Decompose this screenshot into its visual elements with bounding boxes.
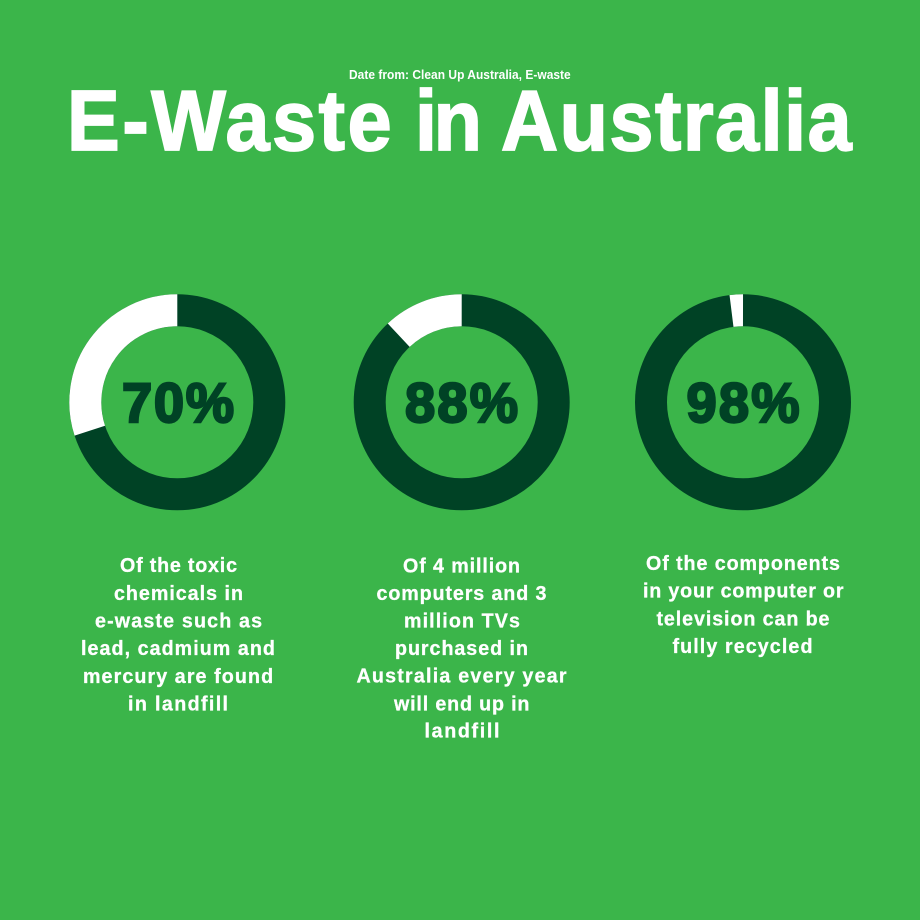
description: toxic chemicals: e-waste such as	[95, 610, 262, 633]
description: recyclable components	[643, 553, 844, 658]
title: in	[415, 74, 482, 169]
description: computers and TVs: million TVs	[404, 610, 520, 633]
description: recyclable components: in your computer or	[643, 580, 844, 603]
description: toxic chemicals: lead, cadmium and	[81, 638, 275, 660]
panel: 70 percent	[81, 310, 275, 716]
description: recyclable components: Of the components	[646, 553, 840, 575]
description: toxic chemicals: mercury are found	[83, 666, 273, 688]
title: E-Waste	[67, 74, 392, 169]
percentage: 70%: 70%	[122, 371, 234, 434]
percentage: 88%: 88%	[405, 371, 518, 434]
description: computers and TVs: computers and 3	[376, 583, 546, 605]
panel: 98 percent	[643, 310, 844, 658]
description: computers and TVs	[356, 555, 567, 743]
description: toxic chemicals: in landfill	[128, 693, 228, 716]
description: computers and TVs: will end up in	[393, 693, 529, 716]
description: computers and TVs: purchased in	[395, 638, 528, 660]
description: computers and TVs: Australia every year	[356, 665, 567, 688]
description: computers and TVs: landfill	[424, 720, 499, 743]
description: toxic chemicals: Of the toxic	[120, 555, 237, 577]
description: recyclable components: television can be	[656, 608, 829, 630]
description: toxic chemicals: chemicals in	[114, 583, 243, 605]
source note: Date from: Clean Up Australia, E-waste	[349, 68, 571, 82]
panel: 88 percent	[356, 310, 567, 743]
donut chart: 98%	[651, 310, 835, 494]
description: computers and TVs: Of 4 million	[403, 555, 520, 577]
description: recyclable components: fully recycled	[672, 636, 812, 658]
title: Australia	[501, 74, 853, 169]
description: toxic chemicals	[81, 555, 275, 716]
donut chart: 88%	[370, 310, 554, 494]
donut chart: 70%	[85, 310, 269, 494]
title	[67, 74, 853, 169]
percentage: 98%: 98%	[686, 371, 800, 434]
